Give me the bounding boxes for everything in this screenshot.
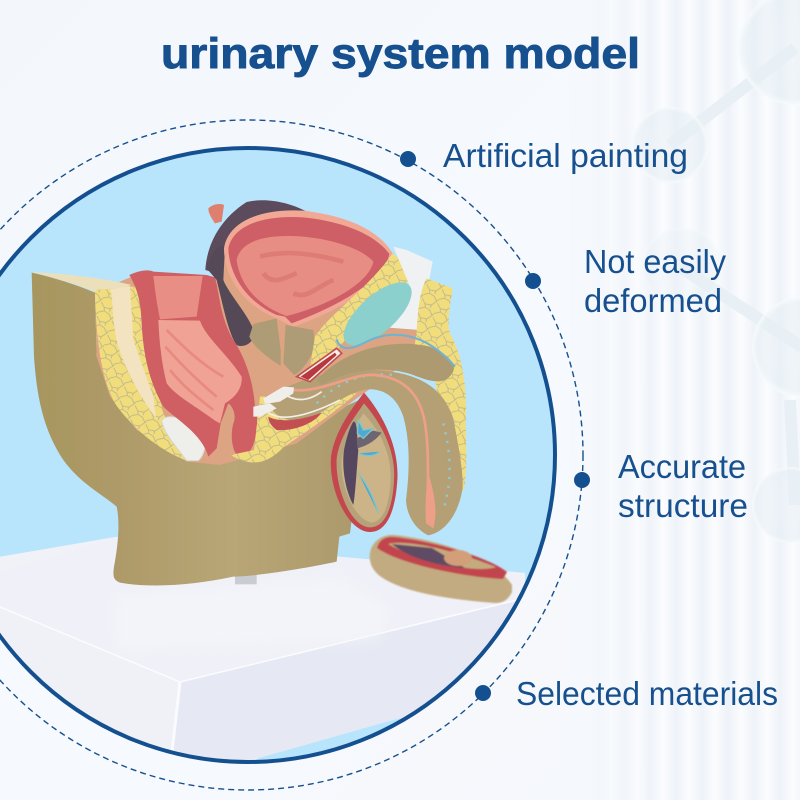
display base platform (0, 537, 530, 770)
sacrum bone band (110, 286, 156, 418)
testis cross-section (331, 393, 398, 532)
removable testis slice (370, 535, 512, 603)
slice purple epididymis (392, 544, 465, 568)
support post (235, 572, 257, 584)
bullet: artificial painting (400, 151, 416, 167)
outer blue circle outline (0, 148, 555, 762)
red inner strip (301, 353, 337, 380)
label: selected materials: Selected materials (516, 675, 778, 712)
bladder muscle (228, 217, 389, 323)
anatomical pelvis model (32, 200, 466, 585)
coccyx white gland (162, 417, 205, 461)
label: accurate structure (618, 448, 748, 524)
title: urinary system model (161, 30, 640, 78)
pelvic diaphragm muscle strip (297, 348, 342, 382)
blue rete testis (357, 420, 380, 513)
bullet: accurate structure (574, 472, 590, 488)
label: accurate structure: structure (618, 487, 748, 524)
ureter stub (208, 204, 224, 223)
label: accurate structure: Accurate (618, 448, 746, 485)
label: not easily deformed: deformed (584, 282, 722, 319)
bullet: selected materials (475, 685, 491, 701)
bladder wall (224, 210, 393, 327)
perineal fat (231, 393, 357, 462)
teal pubic symphysis (334, 272, 422, 356)
dashed outer orbit ring (0, 120, 583, 790)
decorative striped backdrop with molecule bubbles (570, 0, 800, 800)
slice tan ring (388, 543, 496, 569)
dorsal vein (337, 335, 455, 367)
rear fat layer (95, 286, 190, 462)
slice tan lobe (444, 550, 472, 566)
slice top layers (377, 537, 507, 579)
epididymis (343, 422, 358, 505)
urethra (293, 375, 428, 523)
rectal folds (165, 330, 223, 410)
bullet: not easily deformed (525, 273, 541, 289)
epididymis head (357, 431, 382, 448)
photo disc with blue background (0, 140, 560, 770)
anterior pubic fat (310, 253, 411, 367)
penile shaft spongiosum (265, 369, 463, 535)
bladder lumen (237, 236, 373, 316)
seminal vesicle (207, 246, 254, 346)
dorsal corpus cavernosum (317, 344, 454, 385)
top cut strip (32, 272, 132, 294)
cowper glands white (253, 387, 294, 417)
brown body base (32, 273, 367, 585)
label: artificial painting: Artificial painting (443, 137, 688, 174)
purple peritoneal backing (205, 200, 307, 273)
bladder folds (260, 253, 343, 295)
right outer fat wrap (413, 278, 466, 490)
white duct lines (268, 392, 340, 417)
label: not easily deformed: Not easily (584, 243, 726, 280)
bulbar red tissue (268, 413, 322, 430)
blood space dots (317, 374, 450, 510)
section backing (95, 250, 420, 465)
glans fossa (426, 473, 435, 528)
rectum wall (129, 270, 257, 457)
pubic ligament white fibres (385, 247, 433, 330)
label: not easily deformed (584, 243, 726, 319)
rectum lower cavity (158, 320, 242, 423)
rectum upper cavity (153, 276, 203, 319)
prostate lobes (249, 318, 315, 375)
